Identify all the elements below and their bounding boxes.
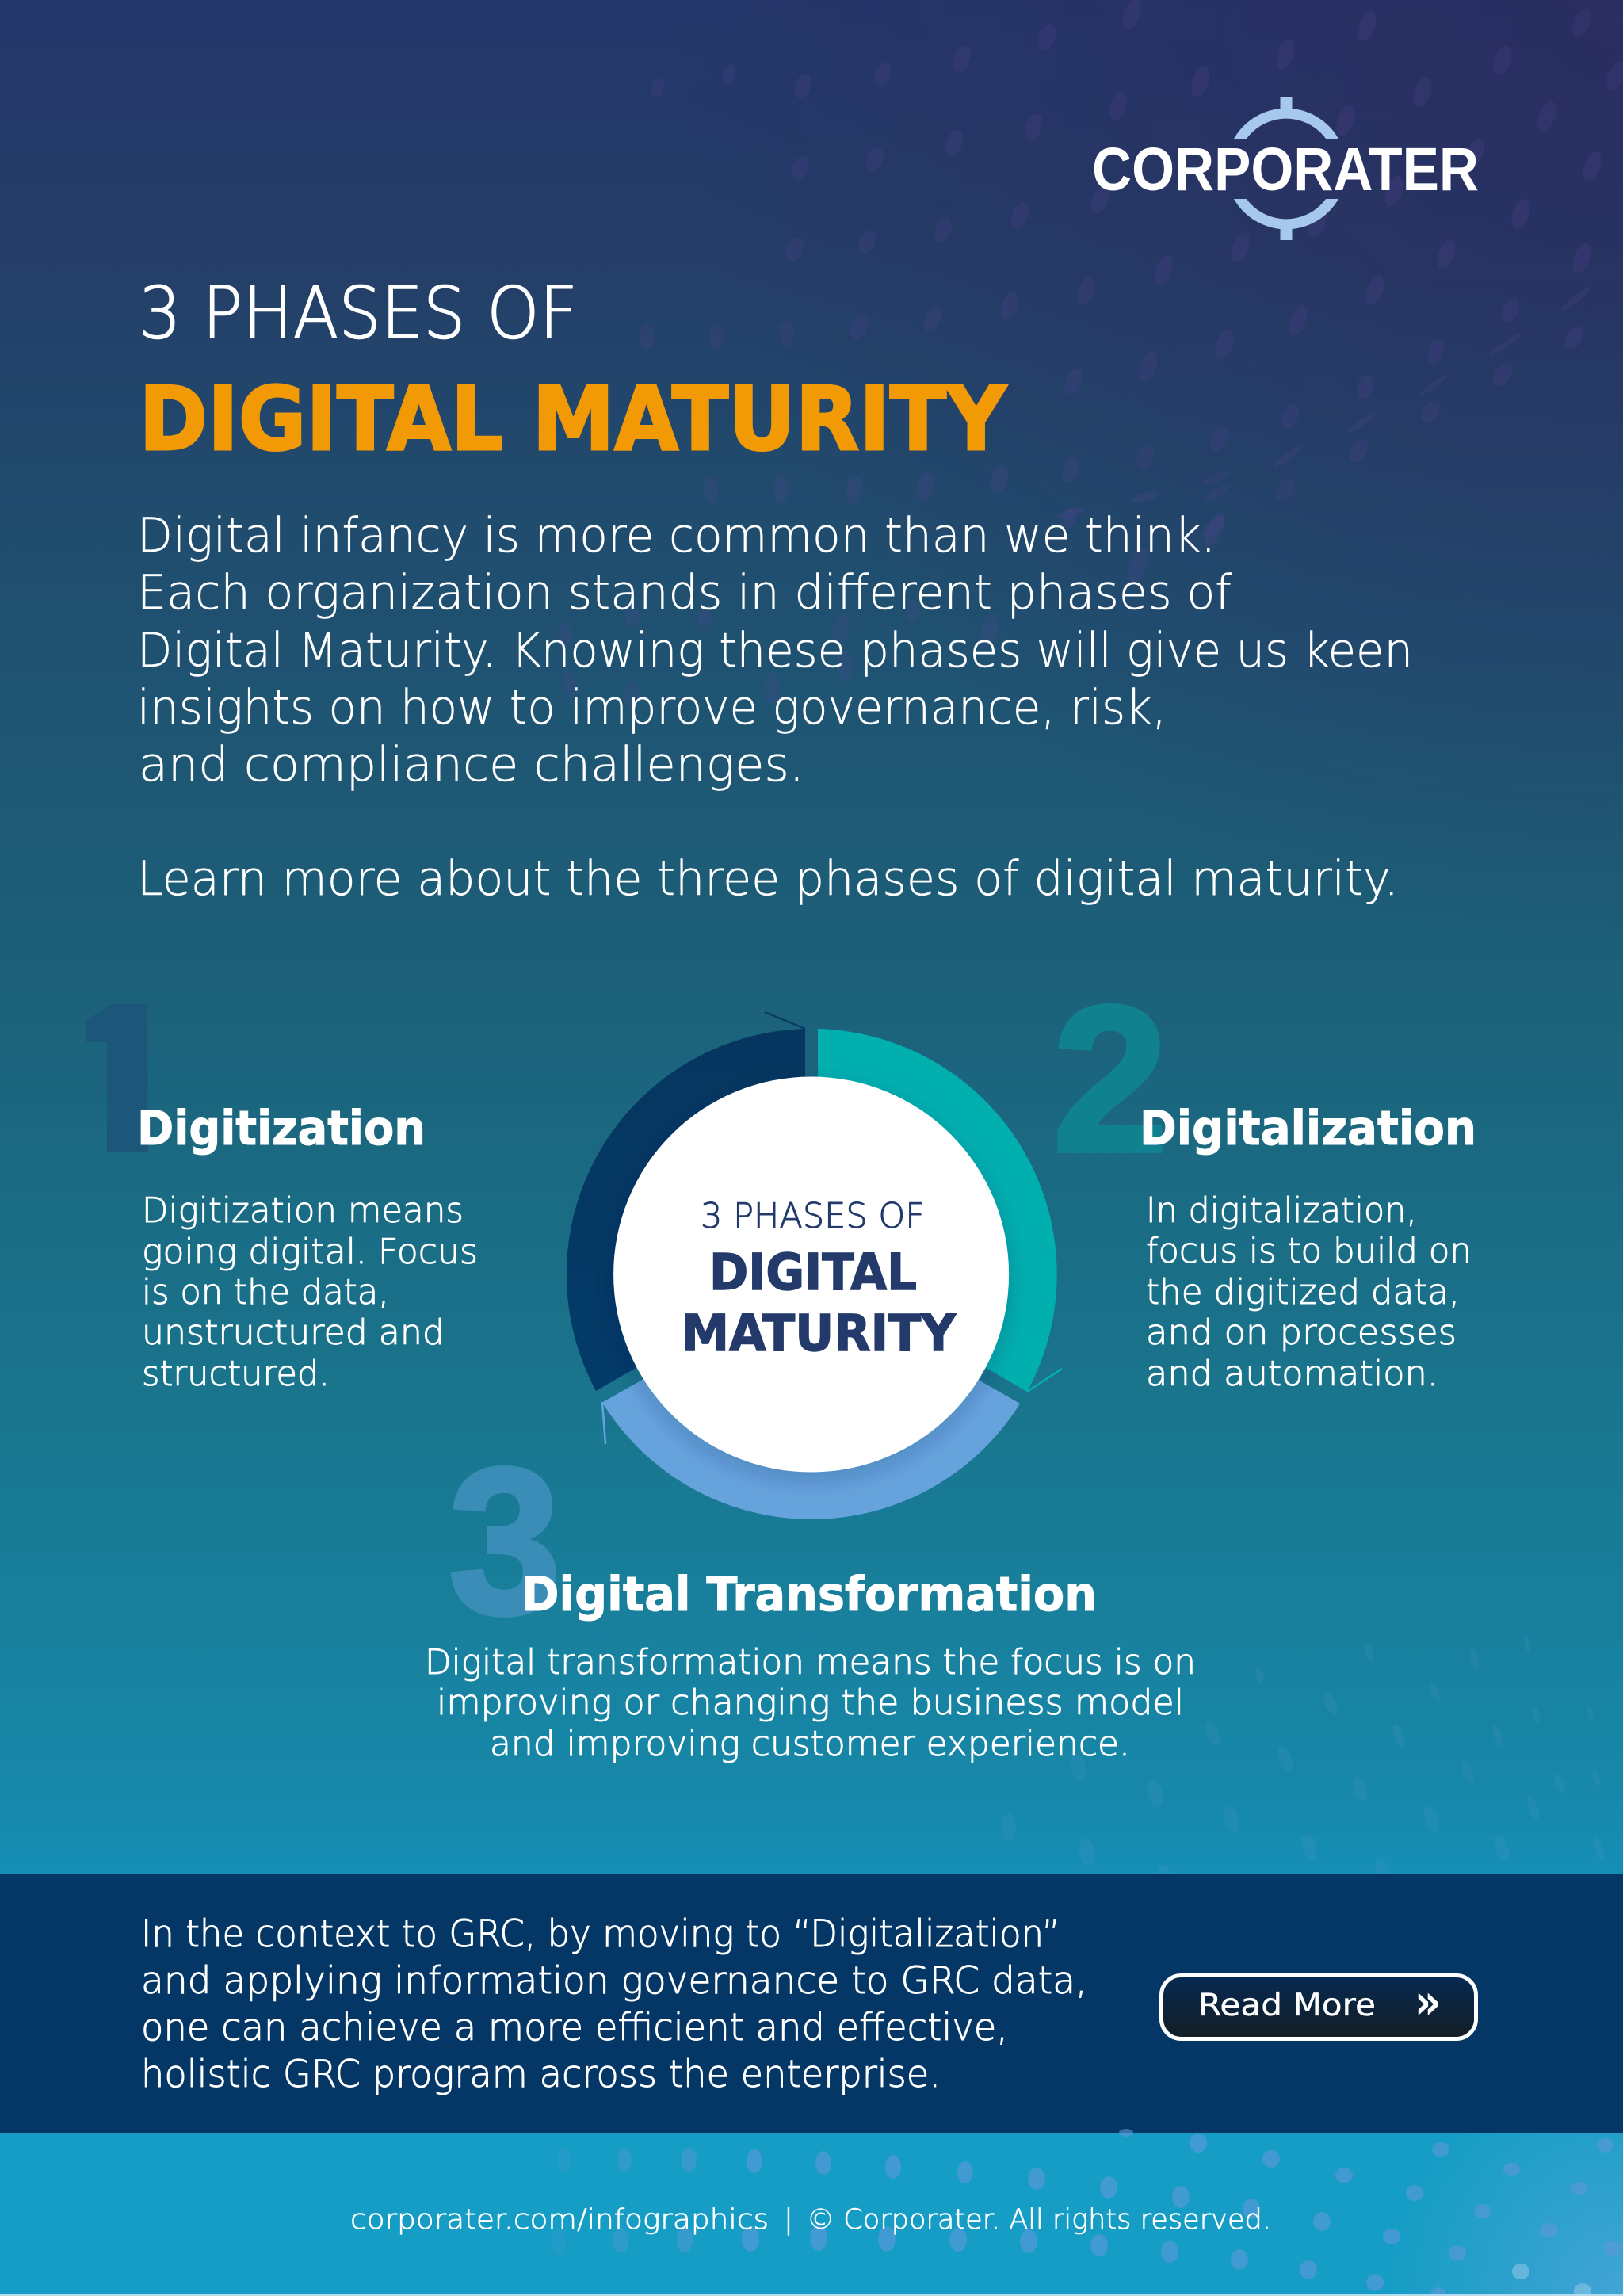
text: digitalization description: focus is to build on — [1146, 1231, 1472, 1271]
text: digitization description — [142, 1190, 478, 1394]
panel: digitization — [137, 1101, 478, 1394]
footer text: corporater.com/infographics — [350, 2204, 769, 2236]
center text: 3 PHASES OF — [701, 1196, 925, 1236]
background dot pattern: lower right — [1002, 1636, 1606, 1883]
footer text: © Corporater. All rights reserved. — [807, 2204, 1271, 2236]
segment: digital transformation blue — [602, 1284, 1020, 1519]
text: GRC statement: holistic GRC program across the enterprise. — [141, 2053, 941, 2096]
text: GRC statement — [141, 1912, 1087, 2096]
text: GRC statement: In the context to GRC, by moving to “Digitalization” — [141, 1912, 1060, 1956]
text: digitization description: unstructured and — [142, 1312, 445, 1353]
heading: digitization: Digitization — [137, 1101, 426, 1156]
logo: Corporater — [1092, 97, 1479, 240]
number 3: 3 — [449, 1425, 561, 1657]
pointer line: blue — [602, 1402, 605, 1444]
button: read more: Read More — [1198, 1988, 1376, 2023]
footer text: | — [784, 2204, 793, 2236]
text: digitalization description: and automation. — [1146, 1354, 1438, 1394]
number 2: 2 — [1052, 963, 1168, 1195]
segment: digitalization teal — [818, 1029, 1057, 1392]
center text: MATURITY — [682, 1305, 957, 1362]
pointer line: dark — [765, 1012, 805, 1029]
footer background — [0, 2133, 1623, 2294]
title line 1: 3 PHASES OF — [139, 272, 578, 355]
heading: digitalization: Digitalization — [1140, 1101, 1476, 1156]
title line 2: DIGITAL MATURITY — [139, 369, 1007, 471]
donut chart: three phases — [567, 1012, 1062, 1519]
center text — [682, 1196, 957, 1362]
panel: digitalization — [1140, 1101, 1476, 1394]
footer dots — [552, 2129, 1621, 2296]
band background — [0, 1874, 1623, 2133]
button: read more: » — [1415, 1973, 1441, 2030]
button: read more — [1162, 1973, 1476, 2038]
text: GRC statement: one can achieve a more efficient and effective, — [141, 2006, 1008, 2050]
intro paragraph: Learn more about the three phases of digital maturity. — [137, 851, 1399, 907]
logo wordmark: CORPORATER — [1092, 136, 1479, 204]
text: digitization description: Digitization means — [142, 1190, 464, 1231]
heading: digital transformation: Digital Transformation — [521, 1567, 1097, 1622]
text: transformation description: and improving customer experience. — [490, 1724, 1130, 1764]
intro paragraph: Each organization stands in different phases of — [137, 565, 1232, 621]
intro paragraph — [137, 508, 1413, 907]
panel: footer — [0, 2129, 1623, 2296]
center circle — [613, 1076, 1009, 1473]
segment: digitization dark — [567, 1029, 805, 1391]
title — [139, 272, 1007, 471]
center text: DIGITAL — [709, 1244, 917, 1301]
text: digitalization description: the digitized data, — [1146, 1272, 1460, 1312]
intro paragraph: and compliance challenges. — [139, 737, 804, 793]
intro paragraph: Digital Maturity. Knowing these phases will give us keen — [137, 623, 1413, 678]
logo reticle icon — [1234, 97, 1338, 240]
text: digitization description: structured. — [142, 1354, 330, 1394]
background dot pattern: upper right — [558, 0, 1623, 710]
number 1: 1 — [66, 969, 176, 1196]
pointer line: teal — [1027, 1369, 1062, 1392]
panel: GRC call to action band — [0, 1874, 1623, 2133]
text: digitalization description: In digitalization, — [1146, 1190, 1417, 1231]
intro paragraph: Digital infancy is more common than we think. — [137, 508, 1216, 563]
panel: digital transformation — [425, 1567, 1196, 1764]
footer text — [350, 2204, 1271, 2236]
text: transformation description: Digital transformation means the focus is on — [425, 1642, 1196, 1683]
text: digitization description: is on the data, — [142, 1272, 389, 1312]
text: digitalization description — [1146, 1190, 1472, 1394]
text: digitalization description: and on processes — [1146, 1312, 1457, 1353]
text: GRC statement: and applying information governance to GRC data, — [141, 1959, 1087, 2003]
text: digitization description: going digital. Focus — [142, 1232, 478, 1272]
text: transformation description — [425, 1642, 1196, 1764]
text: transformation description: improving or changing the business model — [437, 1683, 1184, 1723]
intro paragraph: insights on how to improve governance, risk, — [137, 680, 1167, 735]
